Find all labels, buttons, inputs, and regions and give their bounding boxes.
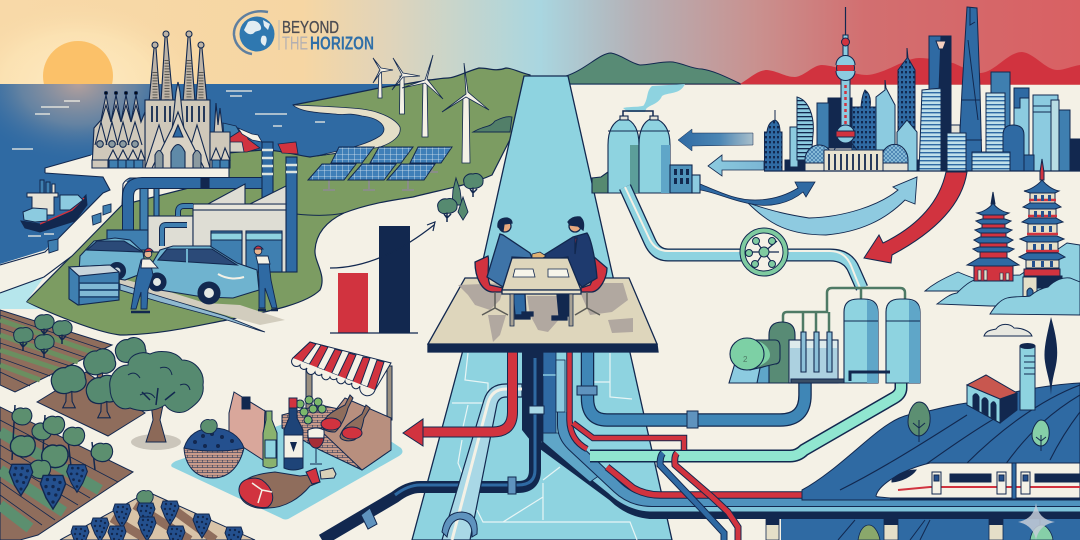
plant tall tank right: [886, 299, 920, 383]
left pagoda: [967, 192, 1019, 281]
sun: [43, 41, 113, 84]
sun glow: [0, 28, 162, 84]
tank side building: [670, 165, 692, 193]
strip field: [0, 310, 112, 392]
farmhouse: [967, 375, 1017, 423]
factory small pipes: [178, 206, 193, 216]
skyline ground line: [764, 170, 1080, 172]
electrolysis plant: 2: [743, 355, 748, 364]
short capped tower: [947, 133, 966, 171]
pipes under table: [322, 352, 1080, 540]
plant horizontal tank: [748, 340, 780, 370]
pipeline valve hub: [740, 228, 788, 276]
train coupling: [1012, 463, 1016, 499]
rear cloud banks: [925, 272, 1000, 291]
sea wave highlights: [12, 91, 325, 236]
train windows: [950, 474, 1080, 482]
red main pipe: [607, 467, 877, 495]
map continents: [458, 283, 633, 342]
logo: [234, 11, 374, 54]
red buildings on coast: [223, 123, 298, 154]
central river: [412, 76, 672, 540]
machine console: [69, 265, 119, 305]
wind turbines: [373, 55, 489, 163]
right chair: [581, 256, 607, 292]
cathedral small gables: [108, 150, 145, 160]
car main: [148, 246, 259, 304]
light swoosh arrow: [748, 177, 917, 235]
olive trees: [51, 337, 146, 418]
red down arrow: [864, 172, 967, 263]
sparkle watermark: [1018, 503, 1055, 540]
jamon ham: [240, 472, 320, 508]
red service branch: [573, 423, 684, 450]
road pale stripe: [120, 284, 265, 332]
olive oil bottle: [263, 411, 277, 468]
cathedral gables: [145, 125, 210, 168]
striped awning: [293, 342, 391, 390]
plant tall tank left: [844, 299, 878, 383]
mint pipe: [590, 383, 901, 456]
light crossing pipe: [442, 384, 522, 540]
skyline glass domes: [805, 145, 833, 171]
train cab window: [892, 470, 916, 482]
right negotiator: [544, 217, 597, 320]
cathedral spires: [149, 31, 207, 102]
under-field details: [838, 519, 1040, 540]
left tank: [608, 118, 639, 193]
cathedral right annex: [214, 103, 223, 135]
lower vine field: [60, 492, 255, 540]
wicker basket: [184, 448, 244, 478]
pier under cathedral: [0, 155, 229, 293]
Jin Mao tower: [898, 48, 915, 130]
vineyard: [0, 407, 133, 540]
blue process pipe: [588, 352, 805, 420]
train doors: [932, 472, 1030, 494]
factory big pipe: [128, 183, 263, 232]
desk papers: [513, 269, 569, 277]
worker two: [254, 246, 278, 310]
blue wedge under column: [543, 433, 600, 482]
light deck band: [548, 440, 1080, 508]
platform top: [428, 278, 657, 344]
vineyard grape clusters: [9, 464, 87, 509]
plant base: [729, 363, 779, 383]
car back: [79, 238, 146, 280]
high speed train: [876, 463, 1080, 499]
middle cloud bank: [937, 243, 1080, 306]
right pagoda: [1019, 159, 1065, 299]
strip-field trees: [14, 315, 72, 358]
factory rear block: [107, 230, 148, 250]
red thin vertical: [570, 352, 587, 449]
plant dark tray: [791, 379, 850, 383]
left negotiator: [487, 218, 533, 319]
left chair: [475, 256, 503, 292]
turbine 1: [373, 58, 393, 98]
SWFC tower: [929, 36, 951, 171]
light column: [556, 360, 565, 412]
hillside trees: [908, 402, 1049, 451]
red export pipe: [420, 352, 512, 432]
right skyline: [991, 72, 1010, 132]
lower field grapes: [71, 490, 243, 540]
red export arrowhead: [403, 419, 423, 446]
viaduct under-field: [781, 519, 1080, 540]
cathedral spire windows: [155, 60, 201, 102]
electrolysis plant: [729, 288, 920, 383]
meeting desk: [502, 258, 581, 290]
cathedral base: [92, 160, 108, 168]
turbine 3: [402, 55, 443, 137]
blue hillside: [802, 383, 1080, 500]
factory sawtooth roofs: [208, 184, 286, 204]
red bar: [338, 273, 368, 333]
small bush hill: [473, 117, 512, 132]
wine bottle: [284, 398, 303, 470]
cathedral rose windows: [97, 141, 103, 147]
market mat: [171, 420, 402, 520]
skyline: [764, 7, 1080, 171]
plant green pipes: [783, 288, 905, 335]
navy band: [540, 444, 1080, 515]
red drop pipe: [675, 453, 738, 540]
large olive tree: [110, 352, 203, 450]
factory chimney: [1020, 344, 1035, 410]
cathedral nave spires: [92, 95, 145, 168]
viaduct pillars: [766, 519, 1003, 540]
tank connector: [623, 111, 653, 118]
handshake: [532, 252, 546, 260]
logo text BEYOND: BEYOND: [282, 17, 339, 37]
growth bar chart: [330, 222, 435, 333]
train stripe: [898, 487, 1080, 490]
striped tower: [919, 88, 941, 171]
factory chimneys: [262, 142, 273, 202]
paper bag: [229, 392, 265, 460]
plant electrolyzer box: [789, 340, 838, 383]
smoke plume: [640, 84, 685, 110]
hydrogen pipeline: [625, 187, 862, 288]
assembly pad and road: [120, 278, 285, 325]
blue column: [543, 352, 556, 433]
cathedral portals: [171, 144, 185, 168]
logo text HORIZON: HORIZON: [310, 34, 374, 54]
light left arrow: [708, 155, 764, 176]
green divider line: [296, 213, 344, 215]
plant green dome: [769, 322, 795, 383]
blue swoosh arrow: [700, 182, 815, 205]
bush beside tanks: [592, 172, 608, 193]
pipe clamps: [361, 386, 698, 537]
cured hams in crate: [322, 395, 370, 441]
blue left arrow: [678, 129, 753, 151]
pale stream: [0, 277, 44, 309]
red mountains: [740, 52, 1080, 84]
skyline exhibition hall: [824, 150, 883, 171]
green produce: [296, 396, 326, 424]
navy bar: [379, 226, 410, 333]
beach sand: [293, 105, 400, 156]
small white cloud: [984, 324, 1032, 336]
front clouds: [990, 278, 1080, 315]
market stall: [184, 342, 392, 508]
factory: [107, 142, 297, 272]
navy trunk pipe: [322, 358, 535, 540]
right tank: [639, 118, 670, 193]
logo globe: [240, 16, 274, 52]
chart baseline: [330, 332, 418, 334]
factory windows: [211, 231, 242, 272]
navy column: [522, 352, 543, 442]
stall posts: [306, 366, 392, 425]
skyline curved tower: [797, 97, 813, 160]
skyline hidden mass: [785, 160, 1080, 171]
factory hall: [193, 204, 286, 272]
cathedral centre spire: [172, 82, 184, 130]
sky gradient: [0, 0, 1080, 85]
pier outline: [0, 155, 229, 293]
platform side: [428, 344, 658, 352]
solar panels: [308, 147, 452, 190]
growth arrow: [330, 222, 435, 268]
dock crates: [48, 204, 111, 253]
stall crate: [282, 405, 391, 470]
logo text THE: THE: [282, 34, 308, 54]
factory small vertical pipes: [140, 188, 148, 234]
cathedral tower body: [145, 100, 210, 168]
turbine 4: [442, 63, 489, 163]
industrial tanks: [592, 84, 700, 193]
cathedral: [92, 31, 230, 168]
olive grove plot: [37, 372, 145, 436]
worker one: [131, 248, 158, 312]
skyline domed block: [852, 90, 877, 150]
logo ring: [234, 11, 268, 54]
train body: [876, 463, 1080, 498]
blue band: [563, 412, 1080, 501]
train underframe: [890, 498, 1080, 500]
skyline tower small dome: [764, 110, 782, 171]
crossing pipe highlight: [452, 389, 522, 540]
tank caps: [620, 116, 628, 120]
green coastal land: [26, 68, 530, 335]
green mountain: [566, 53, 741, 84]
vine stakes and leaves: [10, 405, 113, 479]
small trees on slope: [438, 174, 483, 222]
turbine 2: [392, 58, 420, 114]
river circuit traces: [452, 353, 637, 540]
wine glass: [308, 428, 324, 448]
cargo ship: [21, 180, 87, 232]
cypress tree: [1044, 317, 1057, 395]
blue drop pipe: [660, 453, 724, 540]
sea: [0, 84, 410, 264]
factory low wall: [148, 216, 193, 252]
Shanghai Tower: [958, 7, 982, 171]
hillside furrows: [840, 385, 1080, 490]
sun reflection on sea: [0, 84, 162, 148]
negotiation table platform: [428, 217, 658, 352]
Oriental Pearl tower: [844, 7, 846, 40]
